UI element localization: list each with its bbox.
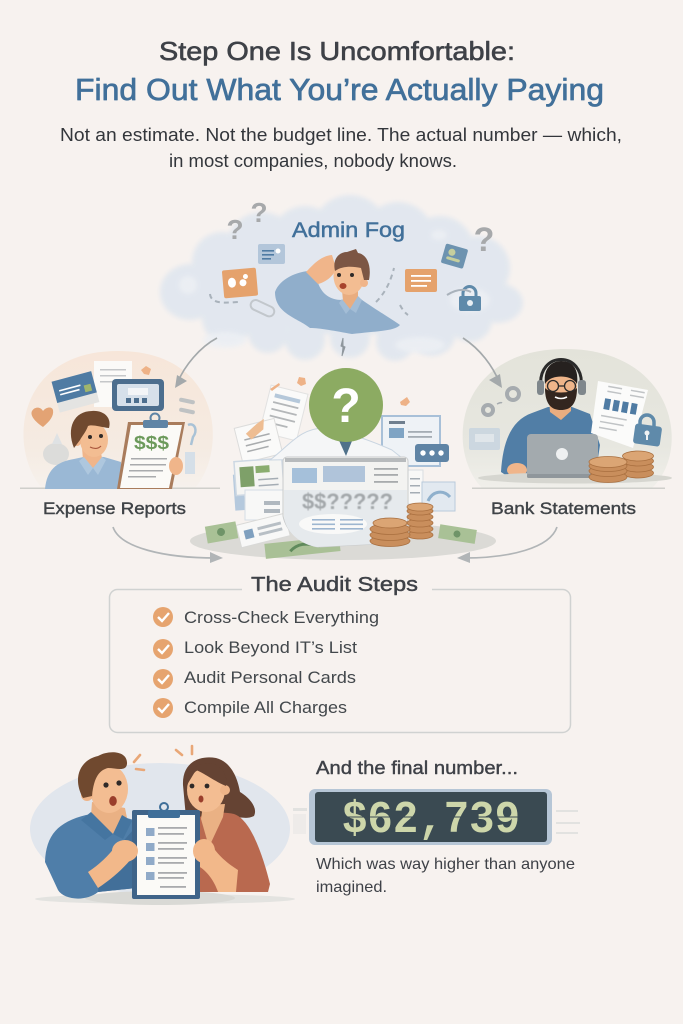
icon: heart (31, 407, 53, 427)
person: confused man (275, 249, 400, 334)
icon: gears (483, 388, 519, 415)
decorations (43, 366, 195, 474)
intro text (60, 124, 622, 171)
coin stacks (589, 451, 654, 482)
back papers (232, 385, 455, 548)
pile shadow (190, 522, 496, 560)
dashed trails and paperclip (210, 268, 471, 318)
icon: credit card (52, 371, 99, 413)
person: man with clipboard (45, 411, 122, 489)
caption (316, 856, 575, 896)
icon: green question bubble: ? (331, 380, 361, 433)
panel: admin fog cloud (160, 195, 523, 361)
message bubble (415, 444, 449, 462)
icon: orange card (222, 268, 258, 298)
title (75, 36, 604, 107)
icon: tablet (112, 379, 164, 411)
question marks: ? (226, 214, 244, 245)
icon: padlock (633, 415, 662, 447)
intro text: Not an estimate. Not the budget line. The actual number — which, (60, 124, 622, 145)
hands (112, 839, 215, 863)
clipboard (132, 803, 200, 899)
caption: Which was way higher than anyone (316, 856, 575, 873)
step 3: Audit Personal Cards (184, 668, 356, 687)
icon: padlock (459, 286, 481, 311)
step 2: Look Beyond IT’s List (184, 638, 357, 657)
illustration: surprised couple with clipboard (30, 746, 295, 905)
step 4: Compile All Charges (184, 698, 347, 717)
green cash (205, 521, 477, 559)
ghost receipts (293, 808, 580, 834)
panel: the audit steps (110, 574, 570, 732)
question marks (226, 197, 494, 259)
dome background (23, 351, 213, 488)
icon: receipt (94, 361, 132, 407)
title: Find Out What You’re Actually Paying (75, 72, 604, 107)
question marks: ? (250, 197, 268, 228)
surprise marks (134, 746, 192, 770)
clipboard with dollar signs (117, 414, 185, 489)
icon: orange list card (405, 269, 437, 292)
digital display: $62,739 (342, 795, 520, 846)
orange scraps (270, 377, 410, 406)
fog cloud shape (160, 195, 523, 361)
label: Expense Reports: Expense Reports (43, 499, 186, 518)
panel: bank statements (463, 349, 672, 518)
icon: green question bubble (309, 368, 383, 456)
clipboard with dollar signs: $$$ (134, 433, 169, 453)
question marks: ? (474, 221, 494, 259)
caption: imagined. (316, 879, 387, 896)
arrow: fog to bank statements (463, 338, 502, 388)
person: bearded man with headset (501, 360, 600, 478)
woman (183, 757, 270, 892)
panel: central paper pile (190, 368, 496, 560)
document with bars (591, 381, 648, 448)
icon: blue card (258, 244, 285, 264)
panel: final number (293, 757, 580, 896)
arrow: bank statements to pile (457, 527, 557, 563)
icon: teal card (441, 243, 468, 269)
digital display (309, 789, 552, 846)
laptop (478, 434, 672, 484)
arrow: fog down to pile (341, 338, 345, 356)
heading: And the final number... (316, 757, 518, 778)
coin stacks (370, 503, 433, 546)
icon: small card (469, 428, 500, 450)
arrow: fog to expense reports (175, 338, 217, 388)
box outline (110, 590, 570, 732)
step 1: Cross-Check Everything (184, 608, 379, 627)
backdrop (30, 763, 290, 895)
heading: Admin Fog: Admin Fog (292, 218, 405, 242)
blurred amount: $$????? (302, 489, 393, 514)
title: Step One Is Uncomfortable: (159, 36, 515, 66)
intro text: in most companies, nobody knows. (169, 150, 457, 171)
dome background (463, 349, 672, 488)
label: Bank Statements: Bank Statements (491, 499, 636, 518)
arrow: expense reports to pile (113, 527, 223, 563)
panel: expense reports (20, 351, 220, 518)
heading: The Audit Steps (251, 574, 418, 596)
main invoice document (270, 428, 408, 547)
man (45, 752, 136, 899)
